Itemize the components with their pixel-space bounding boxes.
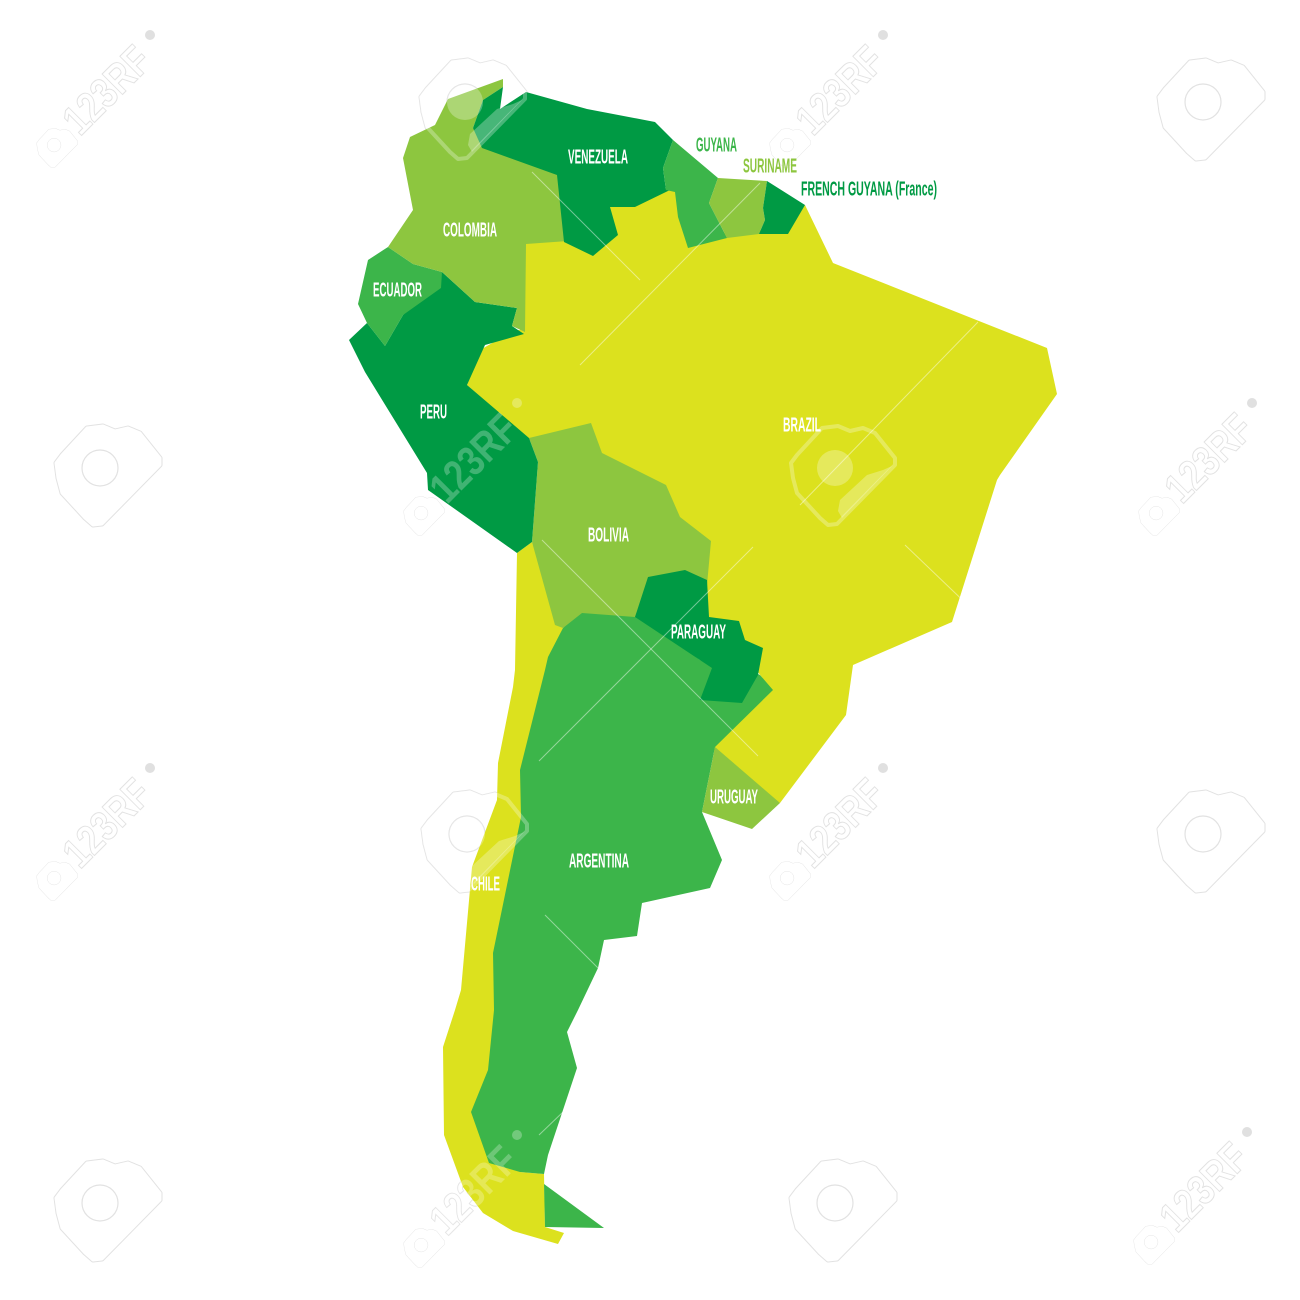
watermark: grey 123RF marks on white background: 123RF: [53, 770, 160, 876]
map of South America: VENEZUELA: [568, 146, 628, 168]
watermark: grey 123RF marks on white background: 123RF: [786, 37, 893, 143]
country: Suriname: [709, 178, 767, 238]
watermark: grey 123RF marks on white background: 123RF: [53, 37, 160, 143]
country: Peru: [349, 272, 538, 553]
map of South America: URUGUAY: [710, 786, 758, 808]
country: Bolivia: [529, 423, 711, 628]
country: Colombia: [388, 79, 568, 332]
label: Suriname: SURINAME: [743, 156, 797, 178]
watermark: grey 123RF marks on white background: 123RF: [420, 405, 527, 511]
map of South America: PARAGUAY: [671, 622, 726, 644]
label: Bolivia: BOLIVIA: [588, 524, 629, 546]
map of South America: GUYANA: [696, 134, 737, 156]
label: French Guyana: FRENCH GUYANA (France): [801, 178, 937, 200]
country: Brazil: [467, 186, 1057, 803]
watermark: grey 123RF marks on white background: 123RF: [786, 770, 893, 876]
label: Brazil: BRAZIL: [783, 414, 821, 436]
country: Guyana: [663, 140, 727, 248]
map of South America: PERU: [420, 402, 447, 424]
watermark: grey 123RF marks on white background: 123RF: [420, 1137, 527, 1243]
watermark crossing lines: [532, 172, 978, 1135]
watermark: translucent 123RF over Peru: 123RF: [420, 405, 527, 511]
country: Uruguay: [702, 747, 780, 829]
watermark: translucent 123RF over Chile: 123RF: [420, 1137, 527, 1243]
label: Argentina: ARGENTINA: [569, 850, 629, 872]
watermark: translucent stamps over the map: [421, 60, 895, 891]
watermark: grey 123RF marks on white background: 123RF: [1150, 1134, 1257, 1240]
country: Venezuela: [473, 87, 673, 256]
island: Tierra del Fuego: [544, 1184, 604, 1228]
country: Chile: [443, 542, 564, 1244]
map of South America: CHILE: [471, 874, 500, 896]
country: Ecuador: [358, 247, 442, 346]
country: Argentina: [471, 608, 773, 1174]
watermark: grey 123RF marks on white background: 123RF: [1155, 405, 1262, 511]
country: French Guiana: [759, 181, 805, 234]
country: Paraguay: [635, 570, 763, 703]
map of South America: ECUADOR: [373, 280, 422, 302]
map of South America: COLOMBIA: [443, 220, 497, 242]
